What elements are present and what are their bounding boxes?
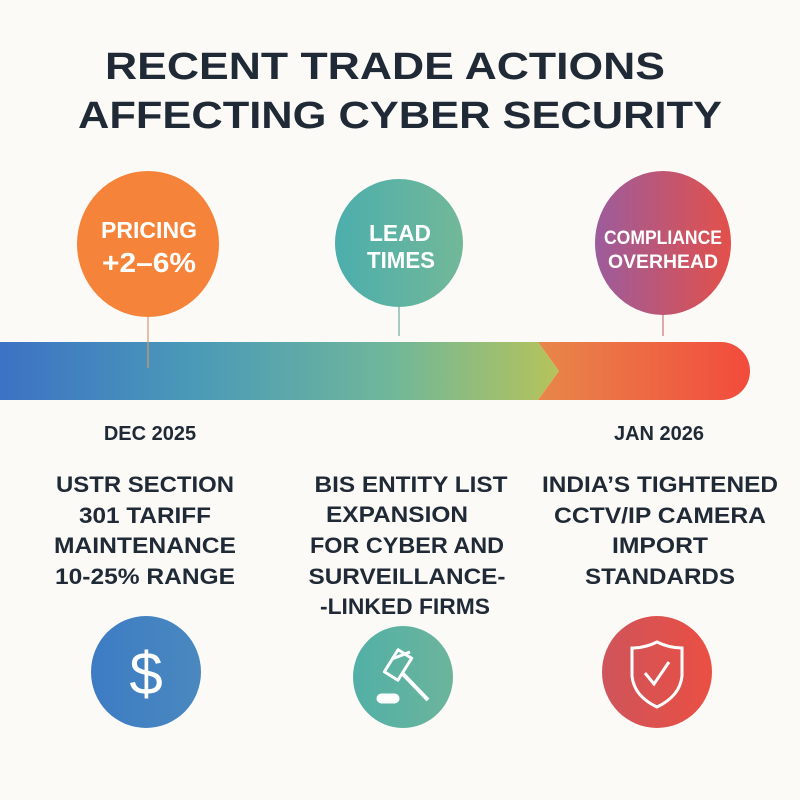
bubble: lead times: TIMES [367,247,435,273]
icon: dollar [91,616,201,728]
bubble: pricing: +2–6% [102,247,196,278]
text: ustr section 301: 10-25% RANGE [55,564,235,589]
text: india standards: STANDARDS [585,564,735,589]
text: ustr section 301: MAINTENANCE [54,533,236,558]
date: jan 2026: JAN 2026 [614,423,704,445]
text: bis entity list: SURVEILLANCE- [308,564,506,589]
bubble: pricing [77,171,219,368]
bubble: compliance overhead: OVERHEAD [608,252,718,273]
text: india standards: INDIA’S TIGHTENED [542,472,778,497]
text: ustr section 301: 301 TARIFF [79,503,211,528]
text: india standards [542,472,778,589]
bubble: compliance overhead: COMPLIANCE [604,228,722,249]
icon: gavel [353,626,453,728]
title: AFFECTING CYBER SECURITY [78,95,722,137]
bubble: lead times: LEAD [369,220,431,246]
text: india standards: CCTV/IP CAMERA [554,503,766,528]
text: india standards: IMPORT [612,533,709,558]
title [78,46,722,137]
date: dec 2025: DEC 2025 [104,423,196,445]
bubble: pricing: PRICING [101,217,197,243]
text: ustr section 301 [54,472,236,589]
text: bis entity list: BIS ENTITY LIST [314,472,508,497]
text: bis entity list [308,472,508,619]
icon: dollar: $ [129,640,163,707]
title: RECENT TRADE ACTIONS [105,46,665,88]
text: bis entity list: EXPANSION [326,502,468,527]
bubble: lead times [335,179,463,336]
text: ustr section 301: USTR SECTION [56,472,234,497]
bubble: compliance overhead [595,171,731,336]
icon: shield [602,616,712,728]
text: bis entity list: FOR CYBER AND [310,533,504,558]
text: bis entity list: -LINKED FIRMS [320,594,490,619]
timeline bar [0,342,750,400]
